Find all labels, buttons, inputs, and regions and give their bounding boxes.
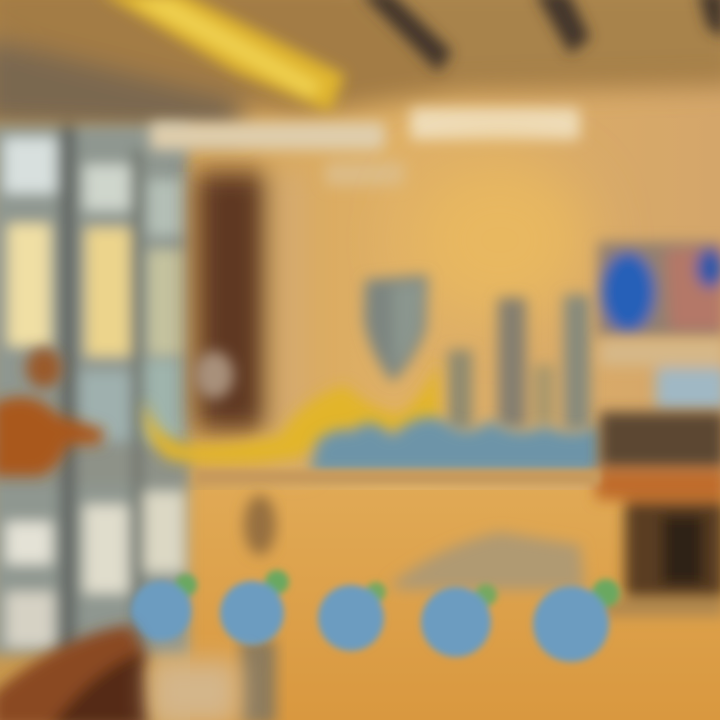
yellow line chart	[144, 360, 440, 464]
ceiling beams	[360, 0, 720, 72]
faint building sketch on wall	[390, 532, 585, 590]
blue area chart	[310, 417, 600, 472]
skyline bars	[448, 295, 590, 430]
shield icon	[364, 275, 428, 382]
person at window	[0, 348, 105, 476]
glow on wall	[410, 160, 590, 320]
orange desk	[596, 412, 720, 616]
small screen	[600, 340, 720, 410]
row of circular icons	[131, 570, 620, 662]
wooden door	[196, 170, 306, 470]
ceiling	[0, 0, 720, 135]
standing figure	[240, 495, 276, 720]
wall screen	[598, 242, 720, 337]
icon circle 5	[533, 579, 620, 662]
icon circle 3	[318, 582, 386, 651]
ceiling light strip	[100, 0, 345, 112]
icon circle 1	[131, 574, 197, 641]
brown band on wall	[195, 470, 600, 484]
floor	[190, 490, 720, 720]
icon circle 2	[220, 570, 289, 645]
sofa	[0, 625, 150, 720]
icon circle 4	[421, 584, 497, 657]
title left part	[150, 122, 385, 150]
bottom floor light	[150, 660, 240, 720]
blurred title	[150, 108, 580, 186]
title right part	[410, 108, 580, 140]
subtitle	[325, 162, 405, 186]
window panel	[0, 125, 190, 655]
